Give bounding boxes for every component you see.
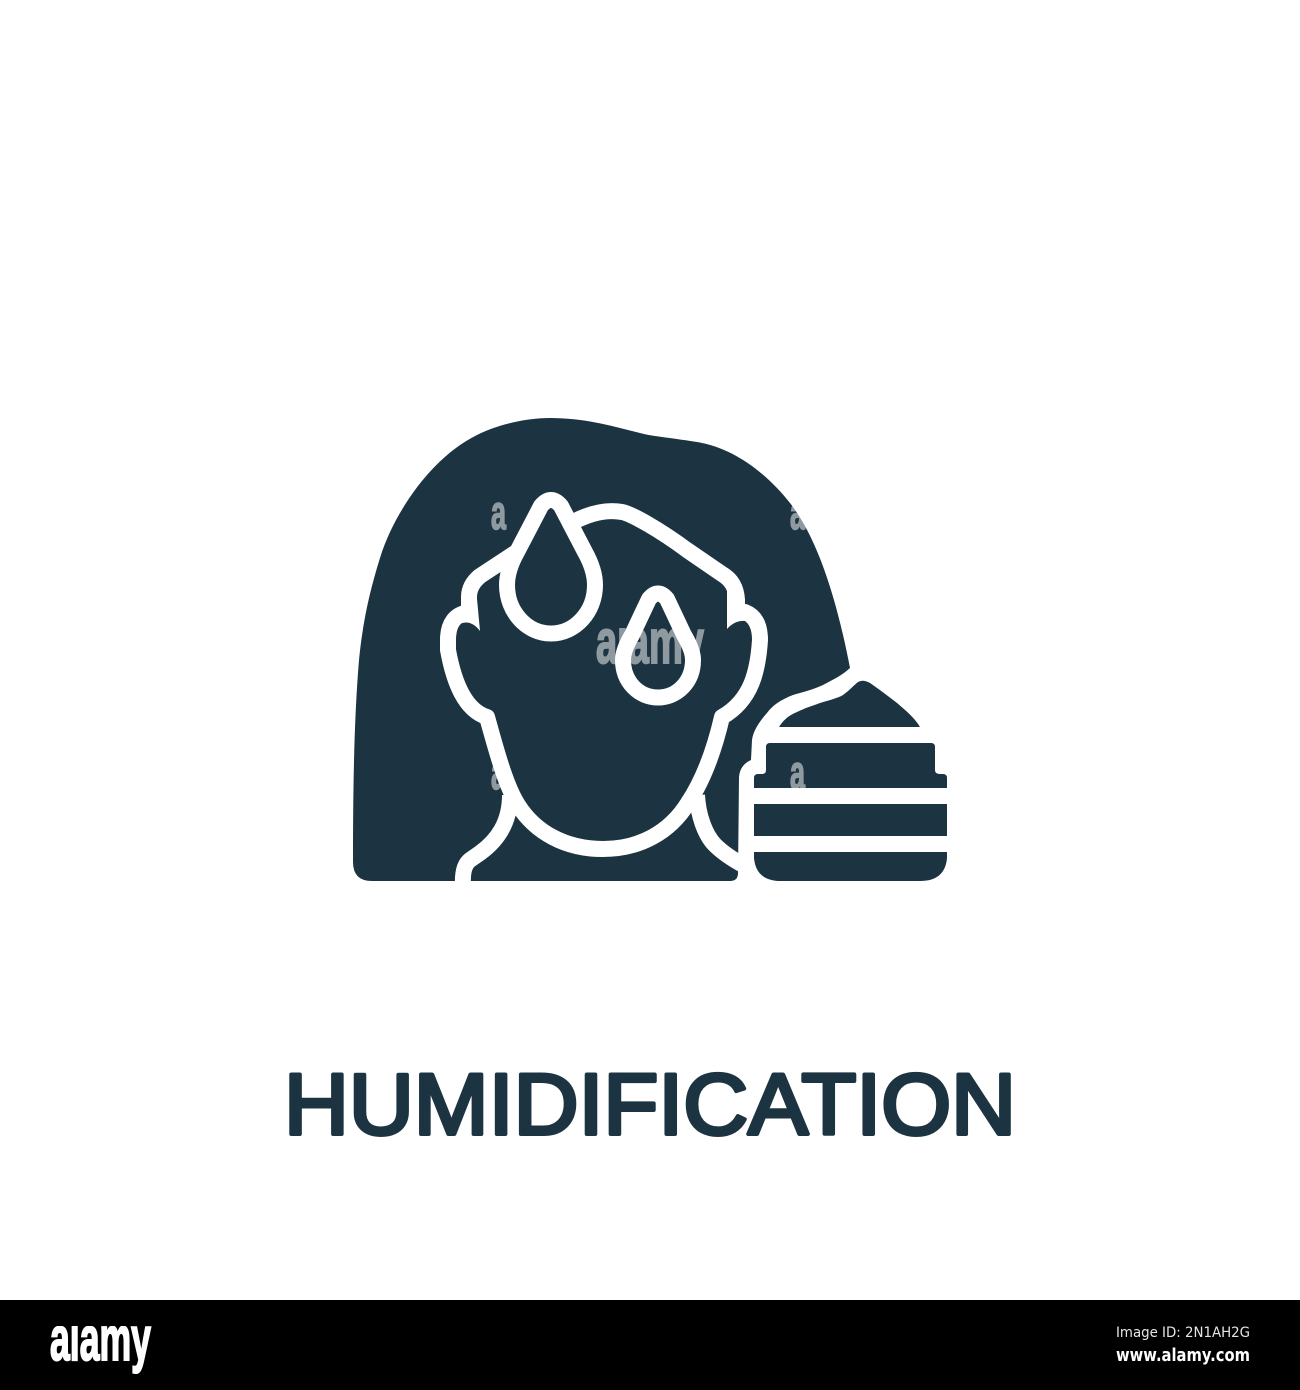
icon: large water drop	[507, 500, 595, 634]
jar lid	[754, 743, 947, 788]
ear notch right	[727, 590, 750, 629]
neck line right	[697, 795, 745, 866]
face outline	[448, 511, 760, 849]
icon: cream jar	[754, 681, 947, 881]
ear notch left	[450, 588, 480, 631]
image id: Image ID: 2N1AH2G	[1116, 1325, 1250, 1341]
icon: woman's face with water drops and cream jar	[353, 418, 947, 885]
title: HUMIDIFICATION	[284, 1057, 1016, 1153]
watermark: alamy letters over icon: a	[491, 487, 506, 540]
jar band	[754, 804, 947, 836]
icon: small water drop	[623, 594, 693, 698]
watermark: alamy letters over icon	[491, 487, 805, 800]
hair and body silhouette	[353, 418, 850, 881]
footer logo: alamy	[50, 1305, 151, 1374]
footer bar	[0, 1300, 1300, 1390]
neck line left	[463, 795, 510, 885]
cream mound	[779, 681, 920, 727]
website: www.alamy.com	[1116, 1345, 1250, 1366]
watermark: alamy letters over icon: a	[491, 747, 506, 800]
jar base	[754, 852, 947, 881]
watermark: alamy letters over icon: a	[790, 487, 805, 540]
watermark: alamy letters over icon: alamy	[596, 608, 704, 677]
watermark: alamy letters over icon: a	[790, 747, 805, 800]
